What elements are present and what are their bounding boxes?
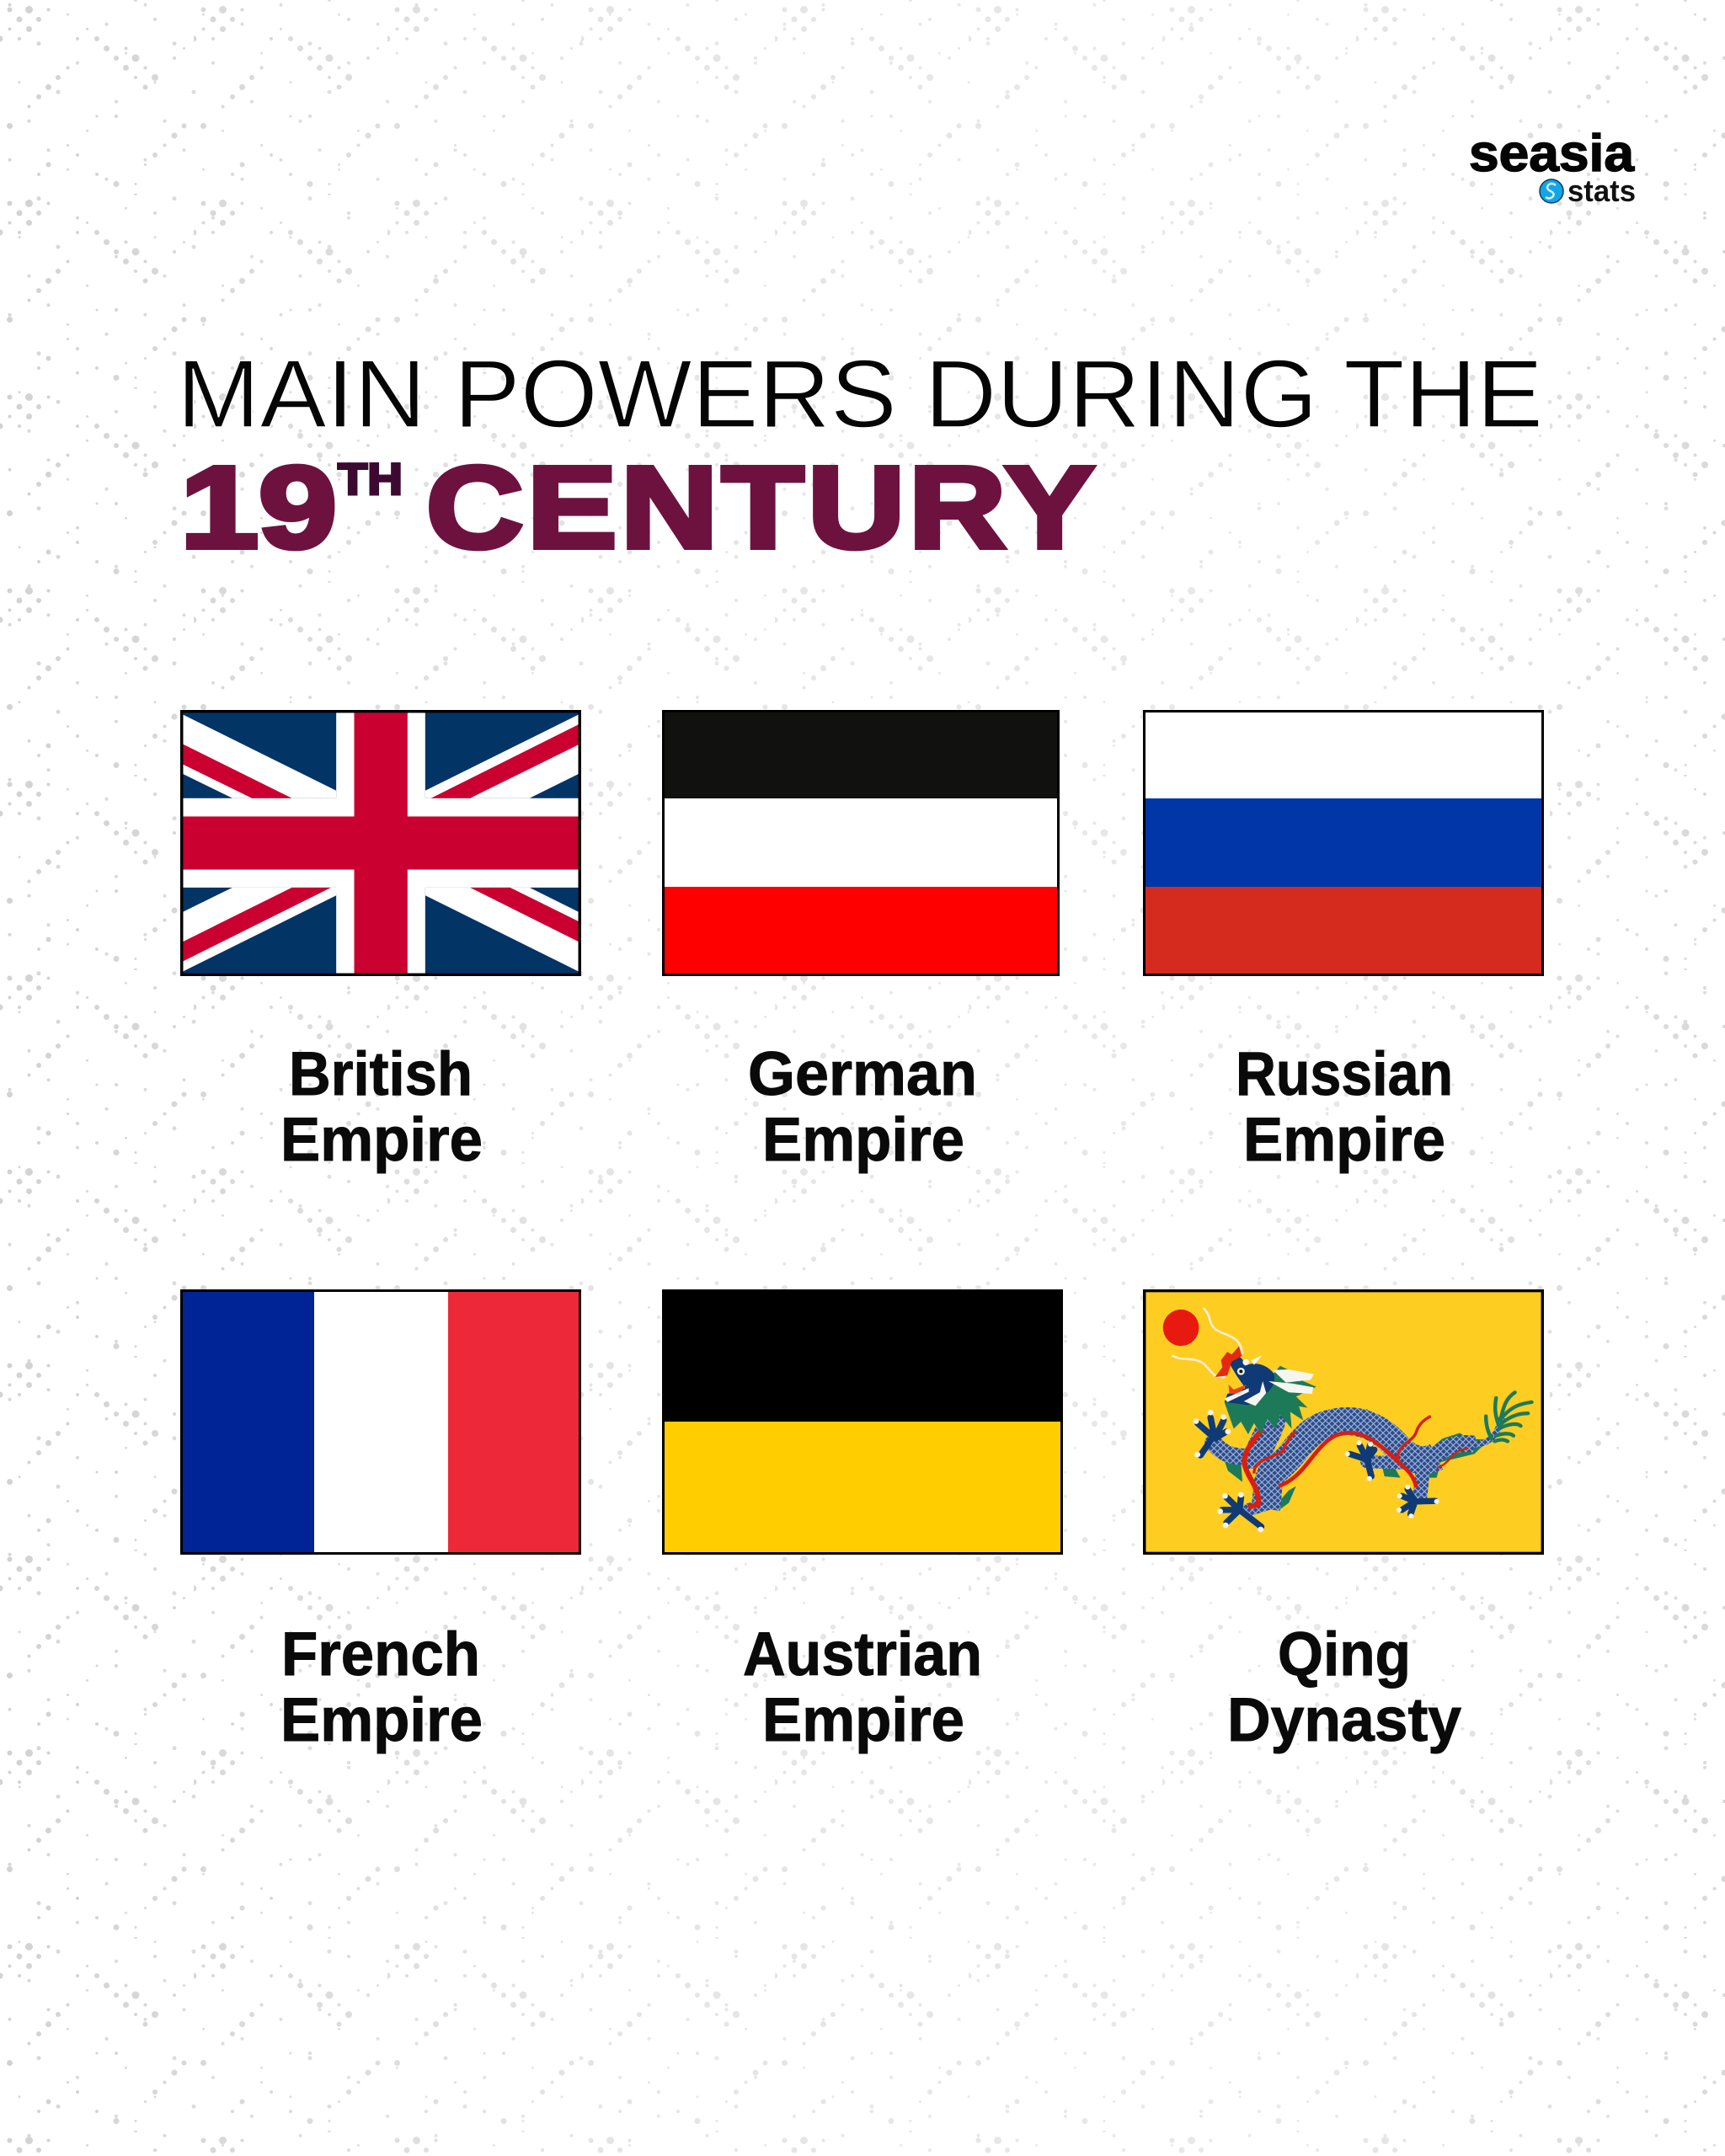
flag: Russian tricolour <box>1144 711 1543 975</box>
label: French <box>281 1620 480 1689</box>
label: Russian <box>1236 1040 1453 1108</box>
panel: Qing Dynasty <box>1143 1289 1544 1754</box>
title line one: MAIN POWERS DURING THE <box>177 341 1543 448</box>
label: Empire <box>280 1686 483 1754</box>
dragon whiskers <box>1172 1308 1242 1378</box>
dragon belly line <box>1244 1417 1469 1508</box>
title line two: 19 <box>180 443 337 573</box>
logo sub-label: stats <box>1567 173 1636 208</box>
title line two: CENTURY <box>426 443 1098 573</box>
panel: German Empire <box>663 711 1059 1174</box>
label: Austrian <box>743 1620 982 1689</box>
logo wordmark: seasia <box>1469 125 1635 183</box>
title line two <box>180 443 1098 573</box>
red sun <box>1163 1310 1199 1346</box>
label: Empire <box>280 1106 483 1174</box>
label: Empire <box>762 1106 964 1174</box>
dragon tail <box>1486 1392 1532 1441</box>
logo: seasia stats <box>1469 125 1636 208</box>
panel: French Empire <box>181 1290 580 1754</box>
flag: Union Jack <box>180 710 581 976</box>
label: German <box>748 1040 977 1108</box>
dragon body <box>1257 1406 1502 1508</box>
label: Dynasty <box>1227 1686 1461 1754</box>
dragon limbs <box>1214 1443 1423 1510</box>
logo globe icon <box>1540 179 1563 203</box>
dragon claws <box>1198 1417 1435 1527</box>
label: Empire <box>1243 1106 1445 1174</box>
dragon beard and mane <box>1225 1366 1316 1434</box>
label: British <box>289 1040 473 1108</box>
flag: French tricolour <box>181 1290 580 1554</box>
title <box>177 341 1543 573</box>
dragon fins <box>1224 1407 1489 1511</box>
label: Empire <box>762 1686 964 1754</box>
flag: Qing yellow dragon <box>1143 1289 1544 1555</box>
dragon head <box>1215 1346 1314 1406</box>
panel: Austrian Empire <box>663 1290 1062 1754</box>
title line two: TH <box>338 455 403 504</box>
label: Qing <box>1278 1620 1411 1689</box>
flag: Austrian bicolour <box>663 1290 1062 1554</box>
panel: British Empire <box>180 710 581 1174</box>
panel: Russian Empire <box>1144 711 1543 1174</box>
flag: German tricolour <box>663 711 1059 975</box>
claw tips <box>1194 1410 1439 1532</box>
